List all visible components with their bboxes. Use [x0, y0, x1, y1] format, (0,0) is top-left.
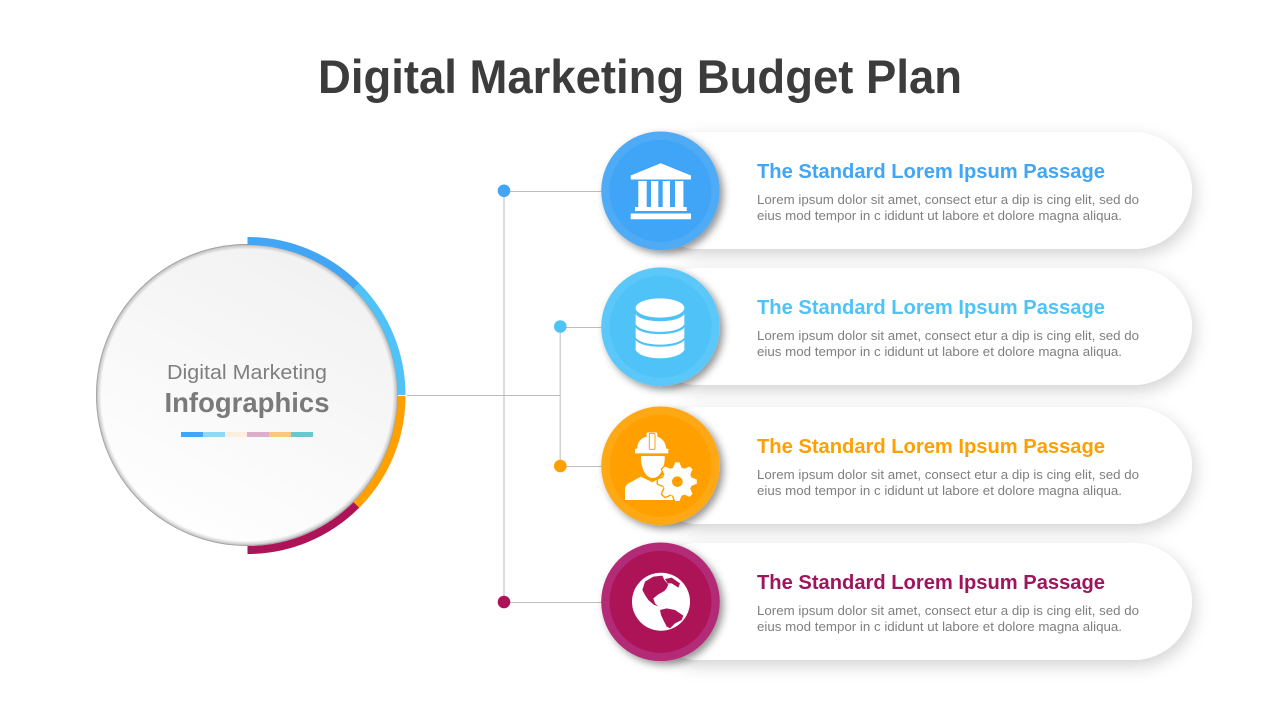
body text: eius mod tempor in c ididunt ut labore et dolore magna aliqua. — [757, 209, 1122, 223]
connector lines — [407, 191, 602, 602]
heading: The Standard Lorem Ipsum Passage — [757, 297, 1105, 319]
ring segment: magenta — [248, 505, 356, 550]
icon: globe on magenta circle — [601, 542, 720, 661]
icon: worker with gear on orange circle — [601, 406, 720, 525]
heading: The Standard Lorem Ipsum Passage — [757, 572, 1105, 594]
panel: item 1 — [640, 132, 1192, 249]
connector dot: item 1 — [498, 184, 510, 197]
pill background — [640, 132, 1192, 249]
central circle — [96, 241, 402, 550]
icon: database on light blue circle — [601, 268, 720, 386]
pill background — [640, 407, 1192, 524]
ring segment: light blue — [356, 286, 402, 395]
colour strip — [181, 432, 313, 437]
title: Digital Marketing Budget Plan — [318, 51, 962, 104]
body text: eius mod tempor in c ididunt ut labore et dolore magna aliqua. — [757, 484, 1122, 498]
ring segment: orange — [356, 396, 402, 505]
central label line 1: Digital Marketing — [167, 362, 327, 384]
pill background — [640, 543, 1192, 660]
icon: bank on blue circle — [601, 132, 720, 250]
body text: eius mod tempor in c ididunt ut labore et dolore magna aliqua. — [757, 345, 1122, 359]
panel: item 3 — [640, 407, 1192, 524]
heading: The Standard Lorem Ipsum Passage — [757, 161, 1105, 183]
connector dot: item 3 — [554, 460, 567, 472]
panel: item 2 — [640, 268, 1192, 385]
ring segment: blue — [248, 241, 356, 286]
body text: Lorem ipsum dolor sit amet, consect etur a dip is cing elit, sed do — [757, 329, 1139, 343]
body text: eius mod tempor in c ididunt ut labore et dolore magna aliqua. — [757, 620, 1122, 634]
panel: item 4 — [640, 543, 1192, 660]
heading: The Standard Lorem Ipsum Passage — [757, 436, 1105, 458]
body text: Lorem ipsum dolor sit amet, consect etur a dip is cing elit, sed do — [757, 604, 1139, 618]
body text: Lorem ipsum dolor sit amet, consect etur a dip is cing elit, sed do — [757, 193, 1139, 207]
connector dot: item 4 — [498, 596, 510, 608]
connector dot: item 2 — [554, 320, 567, 333]
body text: Lorem ipsum dolor sit amet, consect etur a dip is cing elit, sed do — [757, 468, 1139, 482]
pill background — [640, 268, 1192, 385]
central label line 2: Infographics — [164, 387, 330, 418]
